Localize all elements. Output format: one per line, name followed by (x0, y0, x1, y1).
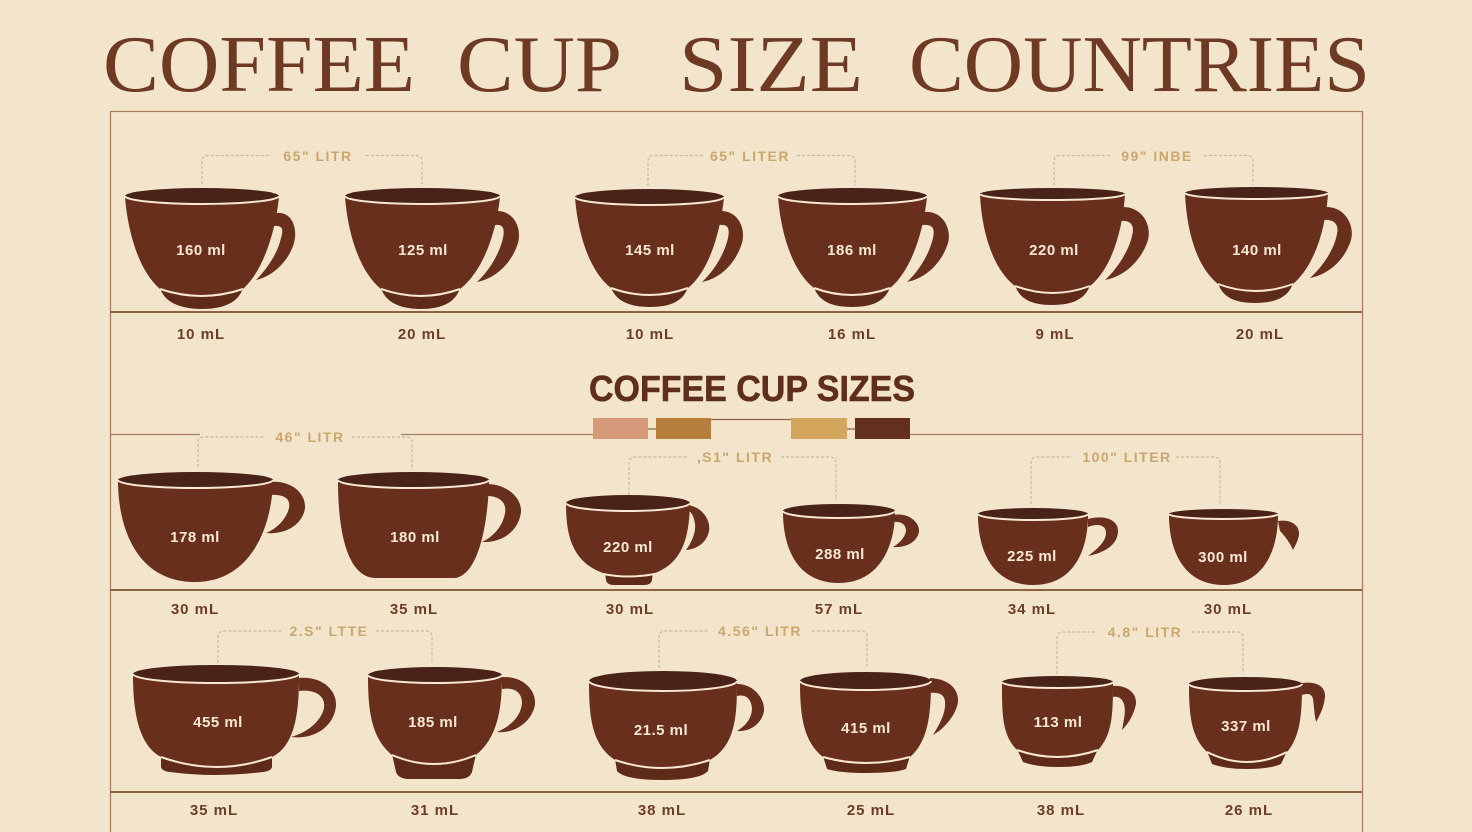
cup 5: 220 ml (980, 188, 1149, 305)
cup 2: 180 ml (338, 472, 521, 578)
capacity labels row 1: 16 mL (828, 326, 876, 343)
cup 6: 300 ml: 300 ml (1198, 549, 1248, 566)
capacity labels row 1: 9 mL (1035, 326, 1075, 343)
title: COFFEE (103, 21, 415, 109)
size bracket: 100 liter: 100" LITER (1082, 449, 1172, 465)
size bracket: 99 inbe: 99" INBE (1121, 148, 1193, 164)
capacity labels row 3: 25 mL (847, 802, 895, 819)
cup 5: 113 ml: 113 ml (1034, 714, 1082, 731)
size bracket: 4.56 litr: 4.56" LITR (718, 623, 802, 639)
panel: row 2 cups (118, 429, 1299, 618)
cup 6: 300 ml (1169, 509, 1299, 585)
cup 4: 285 ml (783, 504, 919, 583)
capacity labels row 1: 10 mL (177, 326, 225, 343)
cup 6: 140 ml: 140 ml (1232, 242, 1282, 259)
capacity labels row 1 (177, 326, 1284, 343)
panel: row 3 cups (133, 623, 1325, 819)
capacity labels row 2: 30 mL (606, 601, 654, 618)
cup 1: 160 ml: 160 ml (176, 242, 226, 259)
size bracket: 2.5 litr (218, 623, 432, 663)
capacity labels row 2 (171, 601, 1252, 618)
subtitle: COFFEE CUP SIZES (589, 368, 915, 409)
cup 5: 225 ml (978, 508, 1118, 585)
cup 3: 21.5 ml: 21.5 ml (634, 722, 688, 739)
cup 4: 186 ml: 186 ml (827, 242, 877, 259)
capacity labels row 2: 57 mL (815, 601, 863, 618)
capacity labels row 2: 30 mL (171, 601, 219, 618)
capacity labels row 2: 30 mL (1204, 601, 1252, 618)
capacity labels row 2: 34 mL (1008, 601, 1056, 618)
capacity labels row 1: 10 mL (626, 326, 674, 343)
legend swatches (593, 418, 910, 439)
cup 1: 160 ml (125, 188, 295, 309)
size bracket: 65 litr (202, 148, 422, 184)
cup 3: 220 ml: 220 ml (603, 539, 653, 556)
capacity labels row 3: 26 mL (1225, 802, 1273, 819)
size bracket: 51 litr (629, 449, 836, 500)
cup 4: 415 ml: 415 ml (841, 720, 891, 737)
cup 3: 21.5 ml (589, 671, 764, 780)
capacity labels row 3: 38 mL (638, 802, 686, 819)
size bracket: 46 litr: 46" LITR (275, 429, 345, 445)
title: CUP (457, 21, 622, 109)
cup 4: 285 ml: 288 ml (815, 546, 865, 563)
size bracket: 4.8 litr: 4.8" LITR (1108, 624, 1182, 640)
capacity labels row 3 (190, 802, 1273, 819)
capacity labels row 1: 20 mL (1236, 326, 1284, 343)
cup 3: 220 ml (566, 495, 709, 585)
size bracket: 99 inbe (1054, 148, 1253, 185)
capacity labels row 3: 38 mL (1037, 802, 1085, 819)
size bracket: 65 litr: 65" LITR (283, 148, 353, 164)
size bracket: 65 liter (648, 148, 855, 186)
cup 2: 125 ml (345, 188, 519, 309)
size bracket: 4.8 litr (1057, 624, 1243, 674)
size bracket: 100 liter (1031, 449, 1220, 505)
size bracket: 65 liter: 65" LITER (710, 148, 790, 164)
cup 3: 145 ml (575, 189, 743, 307)
cup 1: 178 ml: 178 ml (170, 529, 220, 546)
capacity labels row 1: 20 mL (398, 326, 446, 343)
cup 6: 140 ml (1185, 187, 1352, 303)
size bracket: 51 litr: ,S1" LITR (697, 449, 773, 465)
title: COUNTRIES (909, 21, 1370, 109)
panel: row 1 cups (125, 148, 1352, 343)
cup 1: 178 ml (118, 472, 305, 582)
size bracket: 46 litr (198, 429, 412, 470)
capacity labels row 2: 35 mL (390, 601, 438, 618)
cup 2: 185 ml (368, 667, 535, 779)
cup 2: 185 ml: 185 ml (408, 714, 458, 731)
cup 1: 455 ml: 455 ml (193, 714, 243, 731)
size bracket: 4.56 litr (659, 623, 867, 668)
cup 4: 415 ml (800, 672, 958, 773)
size bracket: 2.5 litr: 2.S" LTTE (290, 623, 368, 639)
title (103, 21, 1370, 109)
capacity labels row 3: 35 mL (190, 802, 238, 819)
cup 2: 180 ml: 180 ml (390, 529, 440, 546)
cup 6: 337 ml (1189, 677, 1325, 769)
cup 5: 225 ml: 225 ml (1007, 548, 1057, 565)
title: SIZE (679, 21, 863, 109)
cup 2: 125 ml: 125 ml (398, 242, 448, 259)
cup 5: 113 ml (1002, 676, 1136, 767)
cup 6: 337 ml: 337 ml (1221, 718, 1271, 735)
capacity labels row 3: 31 mL (411, 802, 459, 819)
chart frame and shelf lines (110, 112, 1362, 832)
cup 3: 145 ml: 145 ml (625, 242, 675, 259)
cup 5: 220 ml: 220 ml (1029, 242, 1079, 259)
cup 4: 186 ml (778, 188, 949, 307)
cup 1: 455 ml (133, 665, 336, 775)
